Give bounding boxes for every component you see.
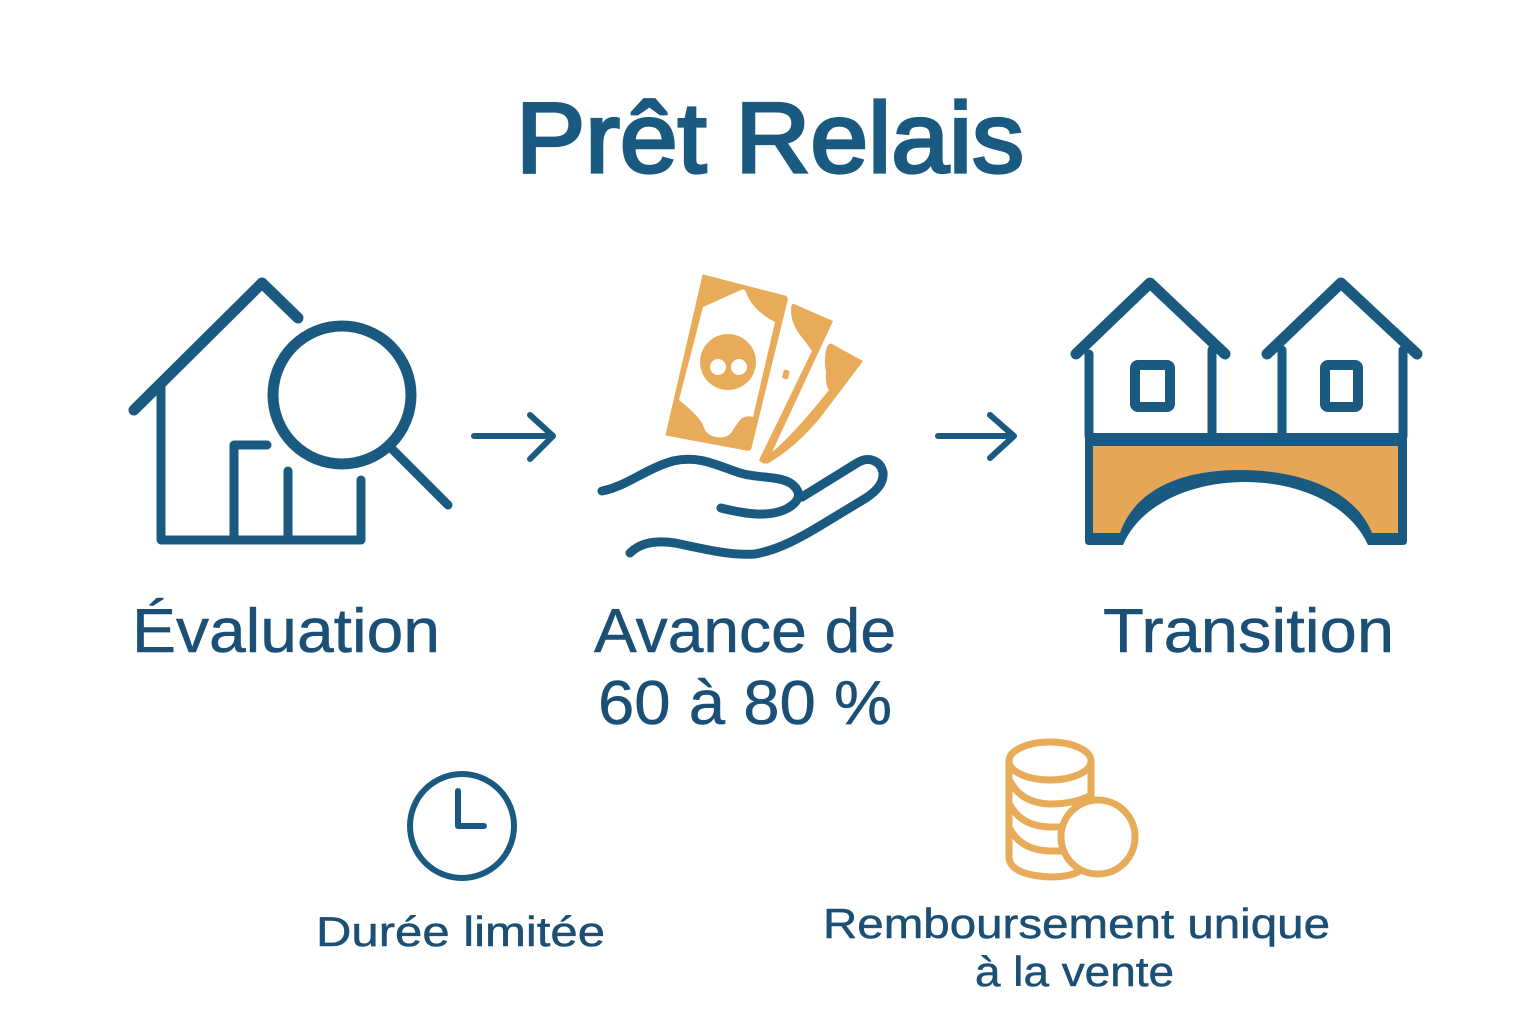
icon: third banknote xyxy=(765,344,863,464)
bridge xyxy=(1085,433,1407,545)
icon: house with magnifying glass xyxy=(134,283,448,540)
arrow: evaluation to advance xyxy=(474,415,553,459)
label: single repayment: Remboursement unique xyxy=(823,900,1330,947)
label: advance: 60 à 80 % xyxy=(598,669,892,738)
icon: open hand xyxy=(602,459,883,554)
title: Prêt Relais xyxy=(516,82,1024,193)
icon: second banknote xyxy=(759,304,833,464)
icon: stack of coins xyxy=(1009,742,1135,877)
label: single repayment: à la vente xyxy=(975,948,1174,995)
icon: two houses on a bridge xyxy=(1076,283,1417,545)
right house xyxy=(1267,283,1417,436)
label: evaluation: Évaluation xyxy=(132,597,440,666)
arrow: advance to transition xyxy=(938,415,1014,458)
icon: clock xyxy=(410,774,514,878)
label: advance xyxy=(594,597,896,738)
label: limited duration: Durée limitée xyxy=(316,908,605,955)
icon: main banknote xyxy=(666,275,787,450)
left house xyxy=(1076,283,1225,436)
label: advance: Avance de xyxy=(594,597,896,666)
label: single repayment xyxy=(823,900,1330,995)
label: transition: Transition xyxy=(1103,597,1394,666)
icon: banknotes above open hand xyxy=(602,275,883,554)
